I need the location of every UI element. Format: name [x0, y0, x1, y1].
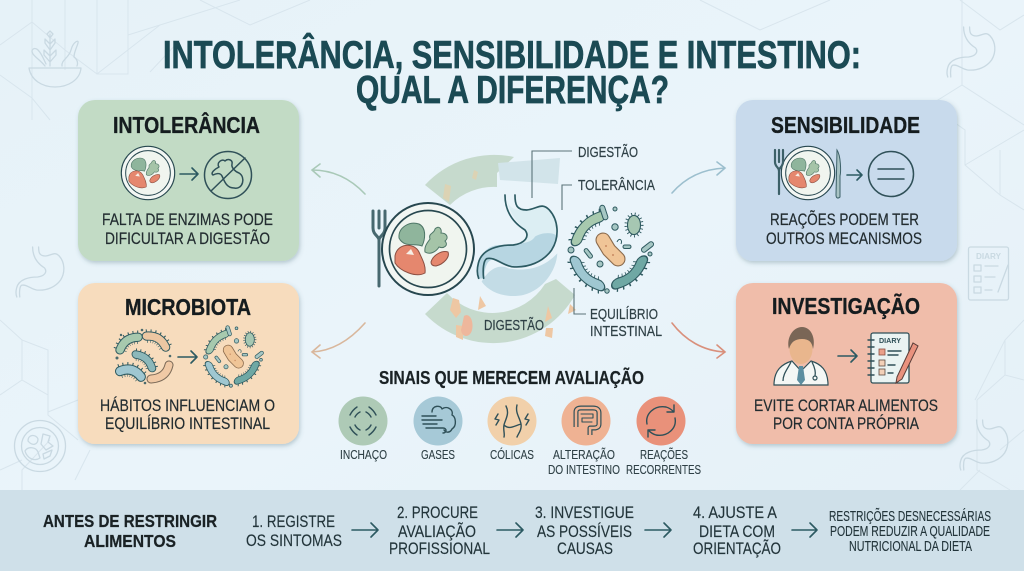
- icon: decorative stomach left: [16, 247, 64, 297]
- cycle ring: [425, 155, 576, 343]
- sign: cólicas: CÓLICAS: [490, 447, 534, 462]
- arrow: [178, 351, 197, 363]
- body text: REAÇÕES PODEM TER: [770, 210, 919, 229]
- label: equilíbrio intestinal: INTESTINAL: [590, 323, 662, 340]
- icon: diary and pen: DIARY: [879, 336, 901, 345]
- arrow: [847, 170, 862, 180]
- arrow: [352, 523, 378, 537]
- arrow: [792, 523, 817, 537]
- step 3: 3. INVESTIGUE: [535, 503, 634, 522]
- icon: food plate: [121, 146, 175, 200]
- footer heading: ALIMENTOS: [84, 531, 176, 551]
- panel: microbiota: [78, 283, 299, 444]
- label: digestão ring: DIGESTÃO: [484, 317, 544, 334]
- sign: gases: [414, 396, 462, 462]
- step 4: [693, 503, 781, 558]
- body text: EQUILÍBRIO INTESTINAL: [105, 414, 270, 433]
- sign: alteração do intestino: DO INTESTINO: [548, 462, 620, 477]
- sign: reações recorrentes: RECORRENTES: [626, 462, 701, 477]
- sign: inchaço: [338, 396, 388, 462]
- icon: doctor: [774, 327, 828, 385]
- body text: [766, 210, 922, 248]
- icon: bacteria cluster: [568, 205, 655, 293]
- label: tolerância: [562, 177, 655, 210]
- footer band: [0, 490, 1024, 571]
- arrow: [497, 523, 523, 537]
- step 1: [246, 512, 342, 550]
- label: digestão: DIGESTÃO: [578, 144, 638, 161]
- step 1: OS SINTOMAS: [246, 531, 342, 550]
- section: sinais: [338, 367, 701, 477]
- step 1: 1. REGISTRE: [252, 512, 335, 531]
- icon: fork: [373, 211, 385, 286]
- step 3: [535, 503, 634, 558]
- heading: sinais: SINAIS QUE MERECEM AVALIAÇÃO: [379, 367, 644, 388]
- sign: reações recorrentes: [626, 396, 701, 477]
- label: digestão: [532, 144, 638, 198]
- icon: bacteria before: [116, 329, 171, 384]
- footer heading: [43, 511, 217, 551]
- icon: decorative diary: [968, 247, 1008, 300]
- body text: DIFICULTAR A DIGESTÃO: [105, 229, 270, 248]
- step 4: DIETA COM: [699, 522, 775, 541]
- body text: [754, 396, 938, 433]
- panel: intolerância: [78, 100, 299, 261]
- arrow: to sensibilidade: [672, 162, 725, 193]
- step 2: AVALIAÇÃO: [398, 522, 476, 541]
- body text: EVITE CORTAR ALIMENTOS: [754, 396, 938, 415]
- icon: plate with cutlery: [775, 146, 841, 200]
- icon: decorative plate: [14, 420, 66, 472]
- label: tolerância: TOLERÂNCIA: [578, 177, 655, 194]
- arrow: [645, 523, 671, 537]
- heading: sensibilidade: SENSIBILIDADE: [771, 112, 920, 138]
- arrow: to intolerância: [312, 164, 365, 194]
- title: INTOLERÂNCIA, SENSIBILIDADE E INTESTINO:: [163, 33, 861, 77]
- sign: inchaço: INCHAÇO: [340, 447, 387, 462]
- arrow: to microbiota: [312, 323, 365, 358]
- step 4: 4. AJUSTE A: [693, 503, 778, 522]
- label: equilíbrio intestinal: EQUILÍBRIO: [590, 306, 658, 323]
- body text: [100, 396, 275, 433]
- arrow: to investigação: [672, 323, 725, 358]
- icon: stomach: [477, 195, 557, 296]
- step 3: CAUSAS: [557, 539, 613, 558]
- body text: OUTROS MECANISMOS: [766, 229, 922, 248]
- step 4: ORIENTAÇÃO: [693, 539, 781, 558]
- note: NUTRICIONAL DA DIETA: [849, 539, 972, 555]
- title: [163, 33, 861, 112]
- icon: decorative stomach bottom right: [960, 420, 1008, 470]
- sign: alteração do intestino: ALTERAÇÃO: [553, 447, 615, 462]
- step 2: PROFISSIONAL: [389, 539, 490, 558]
- note: [829, 508, 991, 555]
- heading: microbiota: MICROBIOTA: [125, 294, 251, 320]
- panel: sensibilidade: [736, 100, 957, 261]
- footer heading: ANTES DE RESTRINGIR: [43, 511, 217, 531]
- step 3: AS POSSÍVEIS: [537, 522, 632, 541]
- icon: diary and pen: [868, 333, 918, 383]
- icon: bacteria after: [204, 325, 264, 387]
- step 2: [389, 503, 490, 558]
- sign: reações recorrentes: REAÇÕES: [640, 447, 688, 462]
- title: QUAL A DIFERENÇA?: [356, 69, 669, 112]
- sign: cólicas: [488, 396, 536, 462]
- arrow: [180, 168, 198, 180]
- icon: decorative bowl with wheat: [29, 31, 81, 87]
- step 2: 2. PROCURE: [397, 503, 478, 522]
- central diagram: [373, 144, 662, 343]
- body text: [102, 210, 273, 248]
- body text: HÁBITOS INFLUENCIAM O: [100, 396, 275, 415]
- icon: decorative diary: DIARY: [976, 252, 1002, 261]
- icon: decorative stomach top right: [947, 27, 995, 77]
- arrow: [838, 350, 857, 362]
- sign: alteração do intestino: [548, 396, 620, 477]
- body text: POR CONTA PRÓPRIA: [773, 414, 920, 433]
- icon: equals circle: [868, 152, 914, 196]
- icon: crossed food: [204, 152, 252, 198]
- heading: investigação: INVESTIGAÇÃO: [772, 292, 920, 319]
- sign: gases: GASES: [421, 447, 455, 462]
- icon: plate: [382, 203, 474, 295]
- body text: FALTA DE ENZIMAS PODE: [102, 210, 273, 229]
- panel: investigação: [736, 283, 957, 444]
- heading: intolerância: INTOLERÂNCIA: [113, 111, 260, 138]
- label: equilíbrio intestinal: [574, 288, 662, 340]
